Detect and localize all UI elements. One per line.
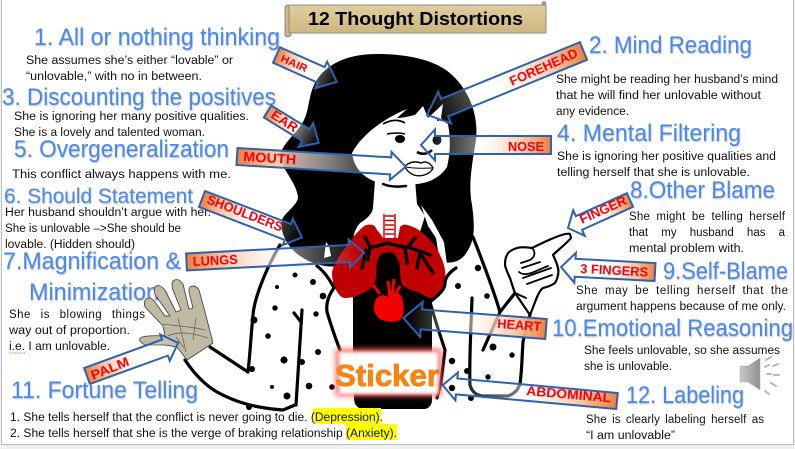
arrow: abdominal <box>441 371 618 415</box>
arrow: nose: NOSE <box>508 139 544 154</box>
section 7: magnification and minimization: way out of proportion. <box>8 325 130 337</box>
icon: palm hand <box>140 280 213 360</box>
section 6: should statement: 6. Should Statement <box>4 185 193 208</box>
section 7: magnification and minimization <box>3 248 181 353</box>
arrow: heart <box>402 301 547 346</box>
section 12: labeling: She is clearly labeling herself as <box>586 414 764 426</box>
arrow: forehead <box>421 35 590 131</box>
hair <box>280 54 476 267</box>
section 8: other blame <box>629 177 786 255</box>
section 7: magnification and minimization: She is blowing things <box>9 309 145 321</box>
section 7: magnification and minimization: 7.Magnification & <box>3 248 181 275</box>
arrow: mouth <box>236 143 407 181</box>
section 2: mind reading <box>556 32 778 118</box>
arrow: hair: HAIR <box>279 53 310 75</box>
arrow: finger: FINGER <box>577 192 629 227</box>
section 5: overgeneralization: 5. Overgeneralization <box>14 136 229 163</box>
sleeve and arm left <box>185 245 340 410</box>
section 8: other blame: She might be telling herself <box>629 211 786 223</box>
arrow: 3 fingers <box>560 252 656 287</box>
arrow: hair <box>271 42 343 95</box>
section 6: should statement: Her husband shouldn’t argue with her. <box>5 207 211 219</box>
section 1: all or nothing thinking: “unlovable,” with no in between. <box>26 71 202 83</box>
section 8: other blame: that my husband has a <box>629 227 786 239</box>
icon: speaker <box>740 357 779 394</box>
section 3: discounting the positives: She is a lovely and talented woman. <box>14 127 205 139</box>
lungs <box>332 214 445 298</box>
section 2: mind reading: that he will find her unlovable without <box>556 90 762 102</box>
arrow: palm: PALM <box>89 354 131 383</box>
arrow: shoulders <box>197 186 307 250</box>
black torso <box>352 252 432 409</box>
section 9: self-blame: She may be telling herself that the <box>576 285 788 297</box>
section 3: discounting the positives: She is ignoring her many positive qualities. <box>14 111 249 123</box>
section 4: mental filtering: telling herself that she is unlovable. <box>557 167 750 179</box>
section 11: fortune telling: 11. Fortune Telling <box>11 377 198 404</box>
arrow: lungs <box>186 239 365 276</box>
arrow: abdominal: ABDOMINAL <box>526 383 612 405</box>
section 9: self-blame <box>576 258 788 313</box>
small white spike left of lungs <box>324 242 331 258</box>
section 5: overgeneralization: This conflict always happens with me. <box>12 169 231 181</box>
right collar wedge <box>421 205 448 272</box>
section 4: mental filtering <box>557 120 776 179</box>
face <box>352 104 450 186</box>
section 1: all or nothing thinking <box>26 24 280 83</box>
section 3: discounting the positives <box>2 84 276 139</box>
section 2: mind reading: 2. Mind Reading <box>589 32 752 59</box>
figure: woman illustration <box>185 54 571 410</box>
title scroll banner: 12 Thought Distortions <box>308 9 523 29</box>
arrow: ear <box>260 100 326 155</box>
section 3: discounting the positives: 3. Discounting the positives <box>2 84 276 111</box>
arrow: mouth: MOUTH <box>243 149 297 167</box>
section 10: emotional reasoning: she is unlovable. <box>584 361 672 373</box>
sticker: Sticker <box>335 358 439 393</box>
section 12: labeling <box>586 382 764 442</box>
section 9: self-blame: argument happens because of me only. <box>576 301 786 313</box>
section 4: mental filtering: 4. Mental Filtering <box>557 120 741 147</box>
sleeve and arm right <box>430 237 530 398</box>
section 12: labeling: “I am unlovable” <box>586 430 675 442</box>
arrow: heart: HEART <box>497 316 542 334</box>
title scroll banner <box>285 2 546 37</box>
section 1: all or nothing thinking: She assumes she’s either “lovable” or <box>26 55 233 67</box>
section 11: fortune telling: 2. She tells herself that she is the verge of braking relationship (Anxiety). <box>10 428 397 440</box>
section 1: all or nothing thinking: 1. All or nothing thinking <box>34 24 280 51</box>
section 5: overgeneralization <box>12 136 231 181</box>
arrow: ear: EAR <box>268 107 301 136</box>
heart <box>373 279 404 322</box>
section 7: magnification and minimization: i.e. I am unlovable. <box>9 341 110 353</box>
arrow: lungs: LUNGS <box>192 252 238 269</box>
arrow: forehead: FOREHEAD <box>507 45 580 89</box>
section 8: other blame: 8.Other Blame <box>630 177 775 204</box>
section 4: mental filtering: She is ignoring her positive qualities and <box>557 151 776 163</box>
section 8: other blame: mental problem with. <box>629 243 744 255</box>
section 6: should statement: lovable. (Hidden should) <box>5 239 135 251</box>
section 2: mind reading: She might be reading her husband’s mind <box>556 74 778 86</box>
arrow: finger <box>562 187 636 241</box>
arrow: palm <box>82 330 183 389</box>
arrow: shoulders: SHOULDERS <box>205 192 285 235</box>
section 2: mind reading: any evidence. <box>556 106 629 118</box>
neck and chest <box>353 180 428 256</box>
section 11: fortune telling <box>10 377 397 440</box>
section 12: labeling: 12. Labeling <box>626 382 744 409</box>
section 7: magnification and minimization: Minimization <box>29 279 159 306</box>
section 10: emotional reasoning <box>552 315 793 373</box>
section 11: fortune telling: 1. She tells herself that the conflict is never going to die. (Depression). <box>10 412 383 424</box>
polka dots <box>246 265 515 410</box>
arrow: nose <box>421 130 551 160</box>
section 10: emotional reasoning: She feels unlovable, so she assumes <box>584 345 780 357</box>
arrow: 3 fingers: 3 FINGERS <box>580 261 649 280</box>
section 6: should statement: She is unlovable –>She should be <box>5 223 181 235</box>
pointing hand <box>505 234 571 315</box>
section 6: should statement <box>4 185 211 251</box>
face features <box>383 120 451 187</box>
